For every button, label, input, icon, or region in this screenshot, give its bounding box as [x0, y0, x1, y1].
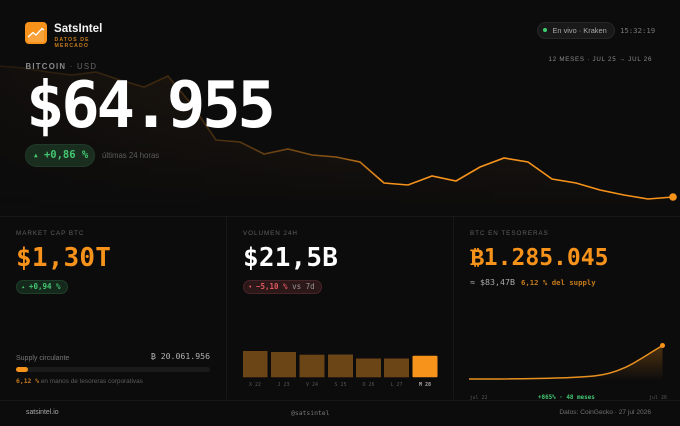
logo — [25, 22, 47, 44]
treasuries subvalue: ≈ $83,47B 6,12 % del supply — [470, 276, 596, 286]
chart growth label: +865% · 48 meses — [538, 395, 595, 401]
hero price: $64.955 — [26, 69, 273, 143]
bar chart: L 27 — [390, 382, 403, 388]
market cap label: MARKET CAP BTC — [16, 230, 84, 236]
hero price chart — [0, 65, 677, 201]
bar chart — [243, 351, 438, 388]
footer source: Datos: CoinGecko · 27 jul 2026 — [559, 409, 651, 416]
volume value: $21,5B — [243, 242, 338, 272]
footer — [0, 400, 680, 426]
24h change pill — [25, 144, 95, 167]
clock: 15:32:19 — [620, 26, 655, 35]
24h caption: últimas 24 horas — [102, 151, 159, 160]
market cap change pill: ▲ +0,94 % — [22, 282, 61, 291]
24h change pill: ▲ +0,86 % — [34, 149, 88, 161]
bar chart: X 22 — [249, 382, 261, 388]
brand name: SatsIntel — [54, 22, 102, 34]
brand tagline: MERCADO — [54, 43, 89, 49]
live status pill — [537, 22, 615, 39]
bar chart: J 23 — [277, 382, 290, 388]
chart end label: jul 26 — [649, 395, 667, 401]
treasuries area chart — [469, 343, 665, 380]
supply label: Supply circulante — [16, 354, 69, 362]
market cap value: $1,30T — [16, 242, 111, 272]
bar chart: V 24 — [306, 382, 318, 388]
supply value: ₿ 20.061.956 — [151, 351, 210, 361]
panel: market cap — [0, 216, 227, 399]
footer handle: @satsintel — [291, 408, 329, 416]
bar chart: D 26 — [362, 382, 375, 388]
market cap change pill — [16, 280, 68, 294]
asset label: BITCOIN · USD — [26, 62, 97, 71]
brand tagline: DATOS DE — [54, 36, 90, 42]
footer site: satsintel.io — [26, 409, 59, 416]
volume label: VOLUMEN 24H — [243, 230, 298, 236]
volume change pill: ▼ −5,10 % vs 7d — [249, 282, 315, 291]
brand tagline — [54, 36, 90, 49]
live status pill: En vivo · Kraken — [552, 26, 607, 35]
panel: volume — [227, 216, 454, 399]
treasuries value: ₿1.285.045 — [470, 244, 608, 270]
volume change pill — [243, 280, 322, 294]
supply progress bar — [16, 367, 210, 372]
treasuries label: BTC EN TESORERAS — [470, 230, 549, 236]
icon: logo chart — [25, 22, 47, 44]
supply note: 6,12 % en manos de tesoreras corporativas — [16, 376, 143, 384]
bar chart: M 28 — [419, 382, 431, 388]
chart date range: 12 MESES · JUL 25 → JUL 26 — [548, 56, 652, 63]
chart start label: jul 22 — [470, 395, 488, 401]
bar chart: S 25 — [334, 382, 347, 388]
panel: treasuries — [454, 216, 680, 399]
